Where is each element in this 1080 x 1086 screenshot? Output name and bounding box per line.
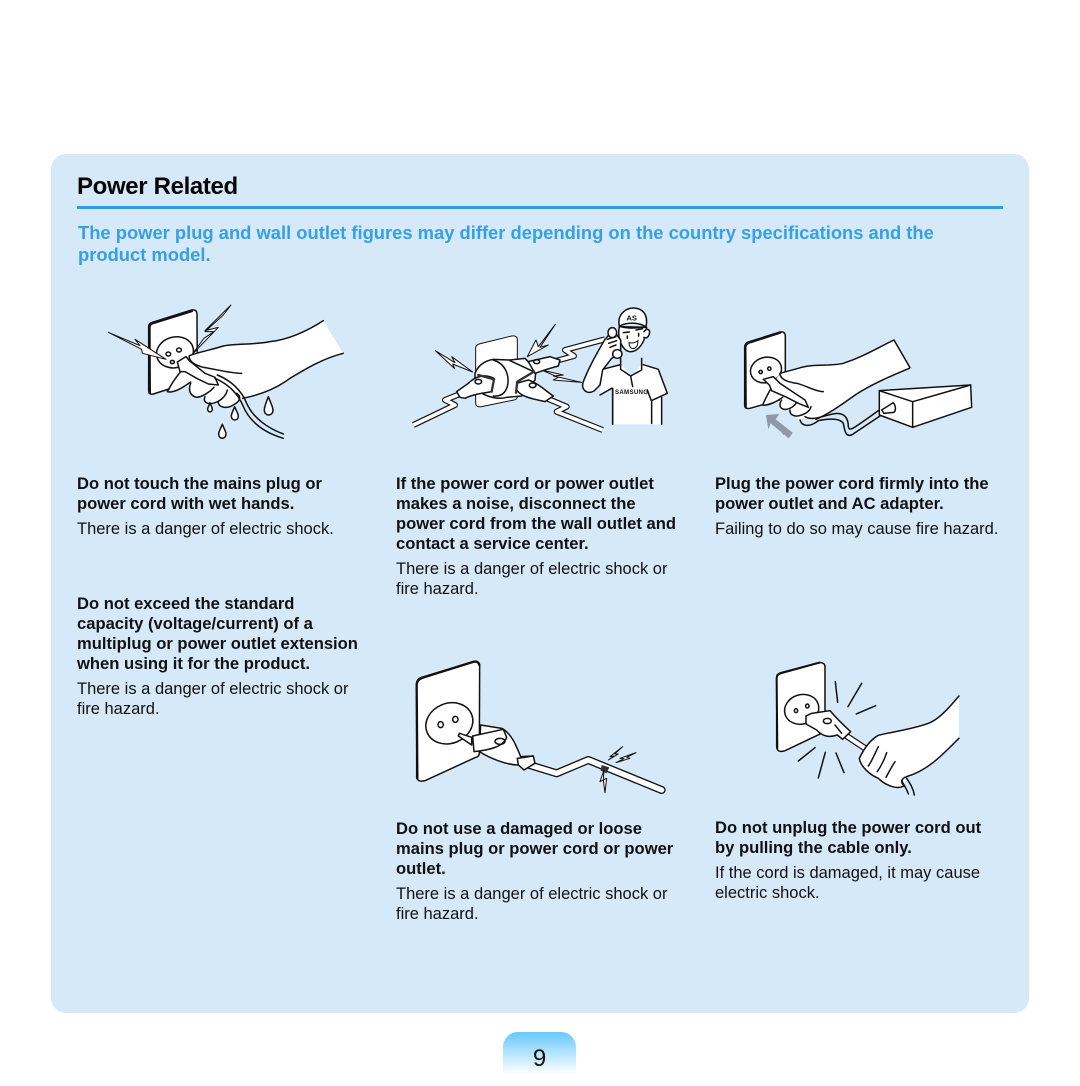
- text: standard capacity: capacity (voltage/current) of a: [77, 614, 313, 633]
- panel: power related: [51, 154, 1029, 1013]
- text: standard capacity: multiplug or power outlet extension: [77, 634, 358, 653]
- text: plug firmly: [715, 474, 998, 538]
- illustration: noisy multiplug and service technician: [413, 308, 667, 430]
- text: plug firmly: Failing to do so may cause fire hazard.: [715, 520, 998, 538]
- text: noise: power cord from the wall outlet and: [396, 514, 676, 533]
- text: damaged cord: outlet.: [396, 859, 446, 878]
- text: plug firmly: Plug the power cord firmly into the: [715, 474, 989, 493]
- text: damaged cord: fire hazard.: [396, 905, 479, 923]
- illustration: noisy multiplug and service technician: AS: [626, 314, 637, 323]
- text: damaged cord: Do not use a damaged or loose: [396, 819, 642, 838]
- illustration: noisy multiplug and service technician: SAMSUNG: [615, 389, 648, 396]
- text: damaged cord: There is a danger of electric shock or: [396, 885, 667, 903]
- text: standard capacity: Do not exceed the standard: [77, 594, 294, 613]
- text: do not pull cable: [715, 818, 981, 902]
- text: plug firmly: power outlet and AC adapter.: [715, 494, 944, 513]
- illustration: plug firmly with AC adapter: [745, 332, 972, 437]
- heading rule: [77, 206, 1003, 209]
- text: wet hands: There is a danger of electric shock.: [77, 520, 334, 538]
- text: standard capacity: [77, 594, 358, 718]
- page number tab: 9: [533, 1045, 546, 1072]
- blue note text: The power plug and wall outlet figures may differ depending on the country specifications and the: [78, 222, 934, 243]
- text: noise: makes a noise, disconnect the: [396, 494, 636, 513]
- text: do not pull cable: Do not unplug the power cord out: [715, 818, 981, 837]
- text: noise: contact a service center.: [396, 534, 589, 553]
- illustration: damaged cord and loose plug: [417, 662, 662, 793]
- text: wet hands: [77, 474, 334, 538]
- text: noise: There is a danger of electric shock or: [396, 560, 667, 578]
- blue note text: [78, 222, 934, 265]
- page number tab: [503, 1032, 576, 1074]
- illustration: wet hand touching plug: [108, 305, 343, 438]
- text: wet hands: power cord with wet hands.: [77, 494, 294, 513]
- text: standard capacity: when using it for the product.: [77, 654, 310, 673]
- text: noise: [396, 474, 676, 598]
- text: damaged cord: [396, 819, 673, 923]
- text: standard capacity: fire hazard.: [77, 700, 160, 718]
- text: do not pull cable: If the cord is damaged, it may cause: [715, 864, 980, 882]
- text: do not pull cable: by pulling the cable only.: [715, 838, 912, 857]
- text: damaged cord: mains plug or power cord or power: [396, 839, 673, 858]
- text: wet hands: Do not touch the mains plug or: [77, 474, 322, 493]
- text: noise: fire hazard.: [396, 580, 479, 598]
- text: noise: If the power cord or power outlet: [396, 474, 654, 493]
- blue note text: product model.: [78, 244, 211, 265]
- text: do not pull cable: electric shock.: [715, 884, 820, 902]
- illustration: hand pulling cable: [777, 663, 959, 795]
- title: Power Related: [77, 173, 238, 200]
- text: standard capacity: There is a danger of electric shock or: [77, 680, 348, 698]
